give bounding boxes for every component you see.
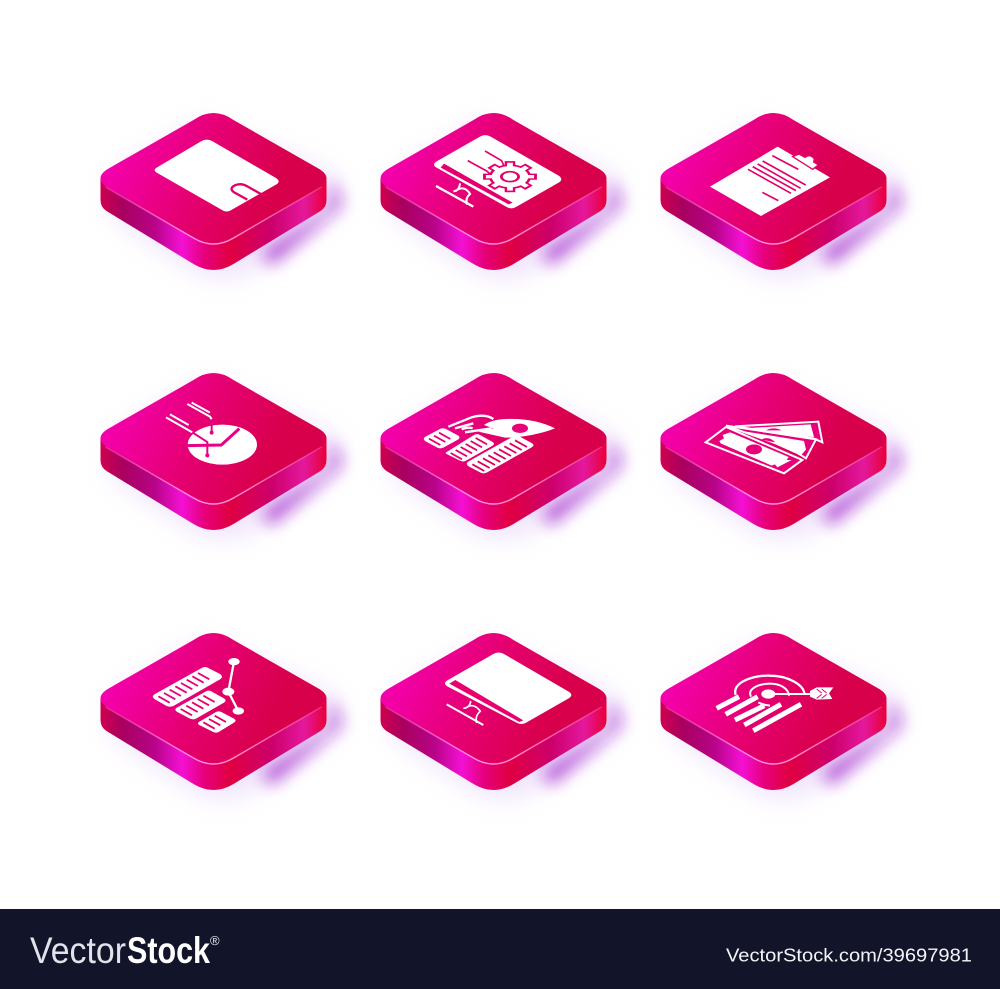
panel: monitor tile (380, 633, 622, 797)
panel: money tile (660, 373, 902, 537)
footer logo: VectorStock: Stock (127, 930, 210, 971)
icon: wallet (155, 140, 279, 211)
panel: rocket coins tile (380, 373, 622, 537)
tile base (660, 633, 902, 797)
icon: monitor with gear (434, 135, 561, 208)
icon: rocket and coins (424, 416, 555, 473)
tile base (380, 633, 622, 797)
panel: coins graph tile (100, 633, 342, 797)
tile base (100, 113, 342, 277)
footer logo: registered mark: ® (210, 933, 220, 948)
panel: clipboard tile (660, 113, 902, 277)
icon: monitor (445, 652, 571, 725)
tile base (380, 373, 622, 537)
panel: target tile (660, 633, 902, 797)
icon: clipboard (710, 147, 830, 216)
tile base (100, 633, 342, 797)
footer image id: VectorStock.com/39697981 (726, 944, 972, 966)
tile base (100, 373, 342, 537)
icon: coins and node graph (153, 658, 244, 733)
panel: monitor gear tile (380, 113, 622, 277)
panel: pie chart tile (100, 373, 342, 537)
icon: target with arrow and bars (717, 676, 833, 731)
tile base (380, 113, 622, 277)
panel: wallet tile (100, 113, 342, 277)
icon: banknotes (706, 422, 822, 473)
tile base (660, 113, 902, 277)
icon: pie chart (166, 403, 257, 465)
tile base (660, 373, 902, 537)
footer logo: VectorStock: Vector (30, 930, 126, 971)
footer bar (0, 909, 1000, 989)
